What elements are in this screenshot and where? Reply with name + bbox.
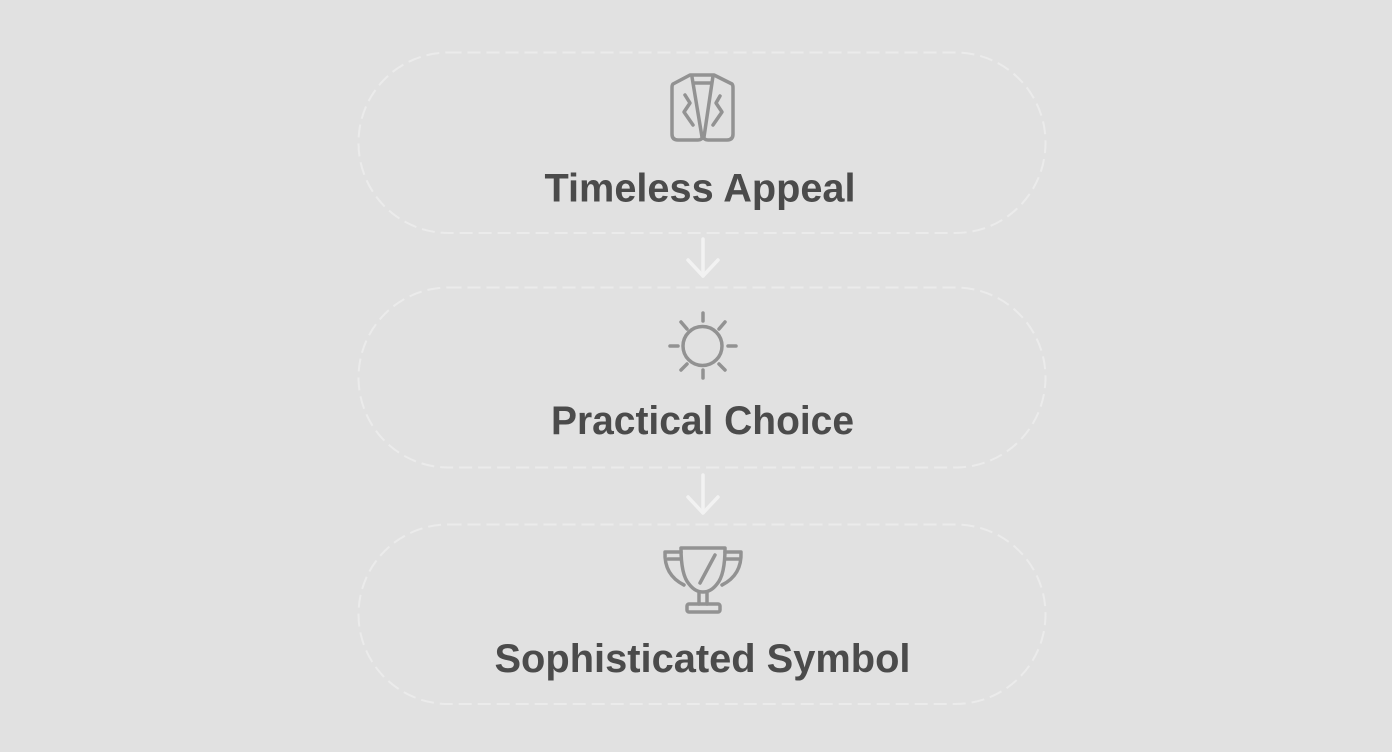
heading: timeless appeal: Timeless Appeal	[544, 166, 856, 210]
icon: sun	[670, 313, 736, 378]
panel: practical choice	[358, 288, 1046, 468]
heading: practical choice: Practical Choice	[551, 399, 854, 443]
arrow: step two to three	[688, 475, 718, 513]
icon: blazer	[672, 75, 733, 140]
arrow: step one to two	[688, 239, 718, 276]
panel: sophisticated symbol	[358, 524, 1046, 704]
heading: sophisticated symbol: Sophisticated Symbol	[494, 637, 910, 681]
icon: trophy	[665, 548, 741, 612]
panel: timeless appeal	[358, 52, 1046, 233]
